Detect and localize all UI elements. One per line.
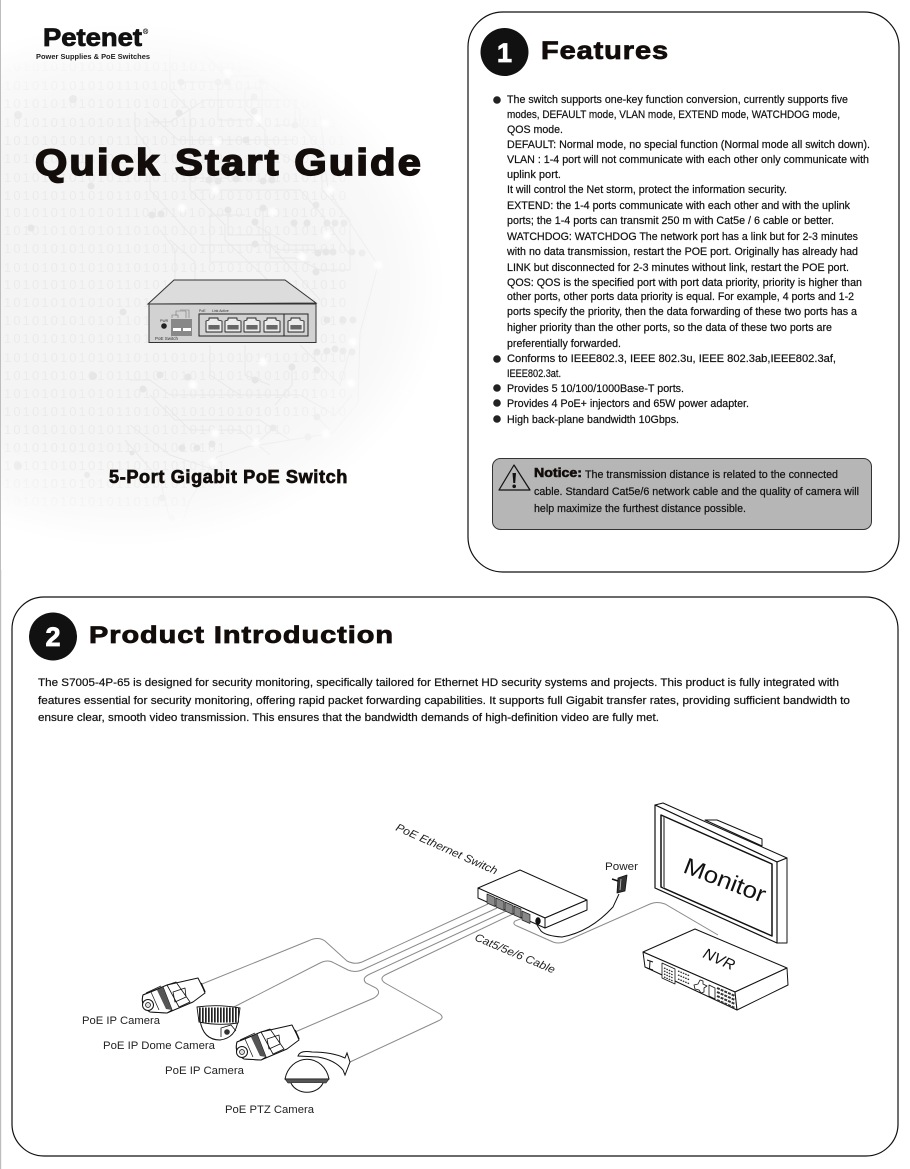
device labels: Cat5/5e/6 Cable	[473, 932, 557, 976]
device labels: NVR	[700, 945, 738, 974]
PoE PTZ camera: PoE PTZ Camera	[225, 1104, 315, 1116]
bullet list: uplink port.	[507, 169, 561, 181]
bullet list	[493, 94, 870, 426]
introduction paragraph: The S7005-4P-65 is designed for security monitoring, specifically tailored for Ethernet HD security systems and projects. This product is fully integrated with	[38, 677, 839, 689]
product illustration: switch front	[148, 280, 316, 342]
section number 1	[480, 28, 528, 76]
bullet list: High back-plane bandwidth 10Gbps.	[507, 414, 679, 426]
PoE IP dome camera: PoE IP Dome Camera	[103, 1040, 216, 1052]
bullet list: EXTEND: the 1-4 ports communicate with each other and with the uplink	[507, 200, 851, 212]
cover background with circuit pattern: 1010101010101110101010101010101010101	[4, 205, 347, 220]
cover background with circuit pattern: 101010101010110101010101	[4, 440, 227, 455]
cover background with circuit pattern	[1, 0, 378, 570]
cover background with circuit pattern: 1010101010101101010101010101010101010	[4, 223, 348, 238]
bullet list: The switch supports one-key function conversion, currently supports five	[507, 94, 848, 106]
PoE IP camera 2	[165, 1025, 299, 1077]
bullet list: VLAN : 1-4 port will not communicate with each other only communicate with	[507, 154, 869, 166]
cover background with circuit pattern: 1010101010101101010101010101010101010	[4, 96, 348, 111]
bullet list: It will control the Net storm, protect the information security.	[507, 184, 787, 196]
bullet list: QOS mode.	[507, 124, 563, 136]
product name: 5-Port Gigabit PoE Switch	[109, 467, 348, 487]
section number 1: 1	[497, 38, 512, 68]
cover background with circuit pattern: 1010101010101101010101010101010101010	[4, 188, 348, 203]
device labels: Monitor	[680, 852, 770, 908]
section number 2	[29, 612, 77, 660]
product illustration: switch front: PoE	[199, 309, 206, 313]
logo: Power Supplies & PoE Switches	[36, 52, 150, 61]
bullet list: WATCHDOG: WATCHDOG The network port has a link but for 2-3 minutes	[507, 231, 858, 243]
cover background with circuit pattern: 1010101010101101010101010101010	[4, 422, 292, 437]
logo: ®	[143, 28, 149, 36]
cover background with circuit pattern: 1010101010101101010101010101010101010	[4, 386, 348, 401]
introduction paragraph	[38, 677, 850, 724]
cover background with circuit pattern: 1010101010101101010101010101010101010	[4, 59, 348, 74]
bullet list: modes, DEFAULT mode, VLAN mode, EXTEND mode, WATCHDOG mode,	[507, 109, 840, 121]
bullet list: Provides 4 PoE+ injectors and 65W power adapter.	[507, 398, 749, 410]
bullet list: ports specify the priority, then the data forwarding of these two ports has a	[507, 306, 857, 318]
power cable	[537, 894, 619, 937]
bullet list: preferentially forwarded.	[507, 338, 621, 350]
cover background with circuit pattern: 1010101010101110101010101010101010101	[4, 78, 347, 93]
page left edge	[0, 0, 1, 1169]
features heading: Features	[541, 37, 669, 65]
notice box: help maximize the furthest distance possible.	[534, 503, 746, 515]
cover background with circuit pattern: 101010101010110101010101	[4, 458, 227, 473]
product illustration: switch front: PWR	[160, 319, 169, 323]
panel: features	[468, 12, 899, 572]
bullet list: with no data transmission, restart the POE port. Originally has already had	[506, 246, 858, 258]
bullet list: IEEE802.3at.	[507, 368, 561, 380]
PoE PTZ camera	[225, 1052, 350, 1116]
introduction paragraph: ensure clear, smooth video transmission. This ensures that the bandwidth demands of high-definition video are fully met.	[38, 712, 659, 724]
PoE IP dome camera	[103, 1006, 240, 1052]
logo: Petenet	[43, 24, 143, 52]
notice box: cable. Standard Cat5e/6 network cable and the quality of camera will	[534, 486, 859, 498]
ethernet switch	[478, 870, 587, 928]
device labels	[394, 822, 770, 976]
notice box: Notice:	[534, 465, 582, 480]
cover background with circuit pattern: 1010101010101101010101010101010101010	[4, 331, 348, 346]
cover background with circuit pattern: 1010101010101101010101010101010101010	[4, 115, 348, 130]
device labels: Power	[605, 861, 638, 873]
product introduction heading: Product Introduction	[89, 622, 394, 649]
cables	[202, 902, 718, 1062]
notice box	[492, 458, 872, 530]
product illustration: switch front: Link Active	[212, 309, 229, 313]
bullet list: QOS: QOS is the specified port with port data priority, priority is higher than	[507, 277, 862, 289]
panel: product introduction	[12, 597, 898, 1156]
bullet list: other ports, other ports data priority is equal. For example, 4 ports and 1-2	[507, 291, 854, 303]
PoE IP camera 1: PoE IP Camera	[82, 1015, 161, 1027]
cover background with circuit pattern: 1010101010101101010101010101010101010	[4, 151, 348, 166]
cover background with circuit pattern: 1010101010101101010101010101010101010	[4, 170, 348, 185]
product illustration: switch front: PoE Switch	[155, 336, 179, 341]
notice box: The transmission distance is related to the connected	[585, 469, 838, 481]
PoE IP camera 1	[82, 978, 205, 1027]
NVR	[643, 929, 788, 1010]
network diagram	[82, 803, 788, 1116]
cover background with circuit pattern: 1010101010101101010101010101010101010	[4, 404, 348, 419]
bullet list: Conforms to IEEE802.3, IEEE 802.3u, IEEE 802.3ab,IEEE802.3af,	[507, 353, 836, 365]
bullet list: higher priority than the other ports, so the data of these two ports are	[507, 322, 832, 334]
section number 2: 2	[45, 622, 61, 652]
cover background with circuit pattern: 1010101010101101010101010101010101010	[4, 295, 348, 310]
cover background with circuit pattern: 1010101010101101010101010101010101010	[4, 313, 348, 328]
power adapter	[612, 875, 627, 893]
cover background with circuit pattern: 1010101010101101010101010101010101010	[4, 277, 348, 292]
cover background with circuit pattern: 10101010101011010101	[4, 494, 190, 509]
cover background with circuit pattern: 1010101010101110101010101010101010101	[4, 133, 347, 148]
cover background with circuit pattern: 101010101010110101010101	[4, 476, 227, 491]
title: Quick Start Guide	[35, 141, 423, 183]
cover background with circuit pattern: 1010101010101101010101010101010101010	[4, 241, 348, 256]
bullet list: Provides 5 10/100/1000Base-T ports.	[507, 383, 684, 395]
monitor	[655, 803, 787, 943]
bullet list: LINK but disconnected for 2-3 minutes without link, restart the POE port.	[507, 262, 849, 274]
bullet list: DEFAULT: Normal mode, no special function (Normal mode all switch down).	[507, 139, 870, 151]
cover background with circuit pattern: 1010101010101101010101010101010101010	[4, 350, 348, 365]
cover background with circuit pattern: 1010101010101101010101010101010101010	[4, 260, 348, 275]
logo	[36, 24, 150, 61]
cover background with circuit pattern: 1010101010101101010101010101010101010	[4, 368, 348, 383]
introduction paragraph: features essential for security monitoring, offering rapid packet forwarding capabilities. It supports full Gigabit transfer rates, providing sufficient bandwidth to	[38, 695, 850, 707]
device labels: PoE Ethernet Switch	[394, 822, 499, 877]
PoE IP camera 2: PoE IP Camera	[165, 1065, 245, 1077]
bullet list: ports; the 1-4 ports can transmit 250 m with Cat5e / 6 cable or better.	[507, 215, 834, 227]
icon: warning triangle	[499, 465, 530, 490]
